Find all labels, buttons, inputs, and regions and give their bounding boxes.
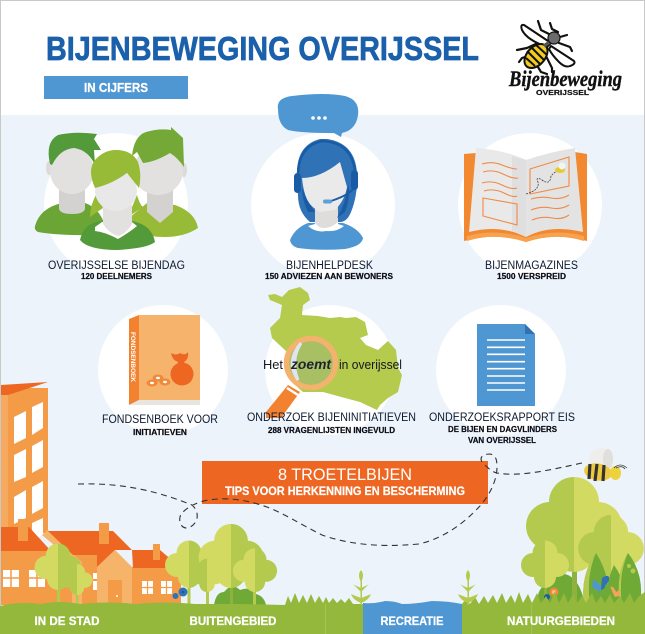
- illustration: blue flowers: [172, 588, 188, 599]
- text: Onderzoeksrapport EIS: [429, 412, 575, 445]
- title: BIJENBEWEGING OVERIJSSEL: [46, 31, 479, 68]
- text: Bijenhelpdesk: [265, 260, 394, 281]
- white circles behind icons: [44, 133, 602, 435]
- label: recreatie: RECREATIE: [380, 616, 444, 628]
- label: buitengebied: BUITENGEBIED: [190, 616, 276, 628]
- illustration: butterflies and flowers: [544, 576, 620, 600]
- text: Fondsenboek voor initiatieven: [102, 414, 218, 437]
- illustration: city trees: [34, 543, 93, 605]
- icon: fondsenboek: FONDSENBOEK: [129, 332, 136, 382]
- illustration: plant right: [458, 570, 478, 605]
- icon: fondsenboek: [129, 315, 200, 405]
- illustration: apartment building: [1, 382, 48, 537]
- icon: three people: [35, 127, 198, 250]
- banner: 8 troetelbijen: TIPS VOOR HERKENNING EN BESCHERMING: [225, 484, 465, 498]
- logo: Bijenbeweging Overijssel: OVERIJSSEL: [536, 88, 589, 97]
- illustration: nature trees and bushes: [521, 477, 644, 605]
- text: Onderzoek bijeninitiatieven: 288 VRAGENLIJSTEN INGEVULD: [268, 426, 395, 435]
- icon: map of Overijssel with magnifier: [263, 287, 402, 418]
- icon: helpdesk operator: [290, 139, 363, 250]
- water: recreatie: [363, 601, 462, 634]
- text: Bijenmagazines: 1500 VERSPREID: [497, 272, 566, 281]
- illustration: row of houses: [1, 519, 181, 605]
- text: Het zoemt in overijssel: in overijssel: [339, 358, 402, 372]
- text: Het zoemt in overijssel: [263, 356, 402, 372]
- logo: Bijenbeweging Overijssel: [508, 21, 622, 97]
- text: Bijenhelpdesk: BIJENHELPDESK: [286, 260, 373, 272]
- text: Onderzoek bijeninitiatieven: ONDERZOEK BIJENINITIATIEVEN: [247, 412, 416, 424]
- text: Fondsenboek voor initiatieven: FONDSENBOEK VOOR: [102, 414, 218, 426]
- banner: 8 troetelbijen: [202, 461, 488, 504]
- bottom ground: [0, 591, 645, 634]
- icon: open magazine: [464, 148, 587, 242]
- text: Het zoemt in overijssel: Het: [263, 358, 284, 372]
- text: Onderzoek bijeninitiatieven: [247, 412, 416, 435]
- label: in de stad: IN DE STAD: [34, 616, 100, 628]
- text: Overijsselse bijendag: 120 DEELNEMERS: [81, 272, 153, 281]
- text: Het zoemt in overijssel: zoemt: [290, 356, 332, 372]
- text: Onderzoeksrapport EIS: VAN OVERIJSSEL: [468, 436, 536, 445]
- icon: document: [477, 324, 535, 406]
- subtitle: in cijfers: IN CIJFERS: [84, 81, 148, 95]
- text: Bijenmagazines: BIJENMAGAZINES: [485, 260, 578, 272]
- banner: 8 troetelbijen: 8 TROETELBIJEN: [278, 465, 412, 484]
- text: Onderzoeksrapport EIS: DE BIJEN EN DAGVLINDERS: [448, 425, 558, 434]
- text: Bijenmagazines: [485, 260, 578, 281]
- label: natuurgebieden: NATUURGEBIEDEN: [507, 616, 615, 628]
- illustration: bee: [583, 448, 627, 483]
- illustration: countryside trees: [165, 524, 277, 605]
- illustration: plant left: [351, 570, 371, 605]
- text: Overijsselse bijendag: [48, 260, 185, 281]
- dashed bee flight path: [78, 454, 582, 545]
- text: Overijsselse bijendag: OVERIJSSELSE BIJENDAG: [48, 260, 185, 272]
- logo: Bijenbeweging Overijssel: Bijenbeweging: [508, 66, 622, 91]
- subtitle: in cijfers: [44, 76, 188, 99]
- text: Bijenhelpdesk: 150 ADVIEZEN AAN BEWONERS: [265, 272, 394, 281]
- speech bubble: [278, 94, 358, 137]
- text: Onderzoeksrapport EIS: ONDERZOEKSRAPPORT EIS: [429, 412, 575, 424]
- text: Fondsenboek voor initiatieven: INITIATIEVEN: [133, 428, 187, 437]
